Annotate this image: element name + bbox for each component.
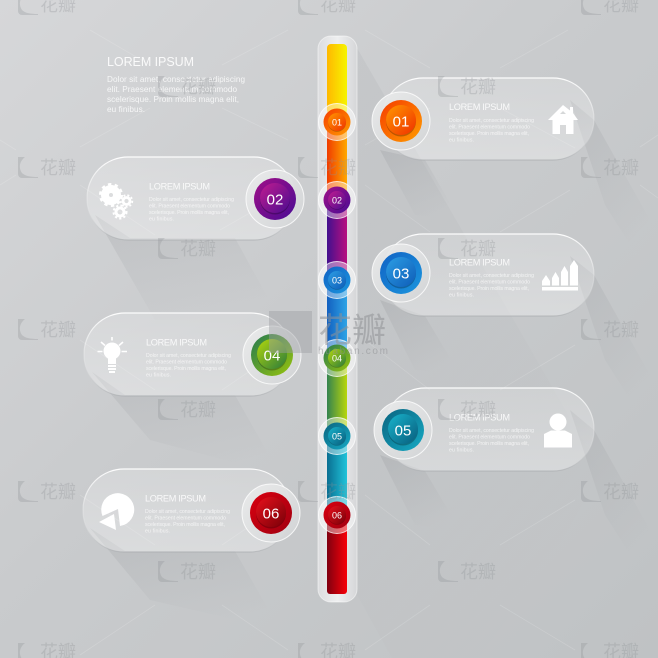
intro body: Dolor sit amet, consectetur adipiscing <box>107 75 245 84</box>
panel 03 <box>372 234 594 316</box>
watermarks: 花瓣 <box>460 400 496 420</box>
small node 06: 06 <box>332 510 342 520</box>
panel 02 text: LOREM IPSUM <box>149 182 210 192</box>
intro body: elit. Praesent elementum commodo <box>107 85 237 94</box>
badge 01 <box>372 92 430 150</box>
panel 05 text <box>449 412 534 454</box>
panel 05 text: scelerisque. Proin mollis magna elit, <box>449 441 529 447</box>
icon: person <box>544 414 572 448</box>
panel 05 <box>374 388 594 471</box>
badge 01: 01 <box>393 114 409 130</box>
watermarks: 花瓣 <box>460 562 496 582</box>
watermarks: huaban.com <box>318 346 388 357</box>
watermarks: 花瓣 <box>180 562 216 582</box>
panel 05 text: Dolor sit amet, consectetur adipiscing <box>449 428 534 434</box>
icon: gears <box>100 184 132 218</box>
panel 01 text: LOREM IPSUM <box>449 102 510 112</box>
panel 03 text <box>449 258 534 298</box>
badge 04: 04 <box>264 348 280 364</box>
watermarks: 花瓣 <box>180 77 216 97</box>
panel 06 text: eu finibus. <box>145 528 170 534</box>
watermarks: 花瓣 <box>603 320 639 340</box>
panel 04 text: eu finibus. <box>146 372 171 378</box>
panel 06 text: LOREM IPSUM <box>145 494 206 504</box>
small node 06 <box>318 496 356 534</box>
panel 03 text: scelerisque. Proin mollis magna elit, <box>449 286 529 292</box>
panel 01 text: eu finibus. <box>449 138 474 144</box>
panel 04 text: LOREM IPSUM <box>146 338 207 348</box>
watermarks: 花瓣 <box>320 158 356 178</box>
small node 01 <box>318 104 356 140</box>
icon: light bulb <box>98 337 127 373</box>
watermarks: 花瓣 <box>40 158 76 178</box>
small node 04: 04 <box>332 354 342 364</box>
badge 02 <box>246 170 304 228</box>
panel 04 text: elit. Praesent elementum commodo <box>146 360 227 366</box>
panel 02 text <box>149 182 234 222</box>
watermarks: 花瓣 <box>603 158 639 178</box>
panel 06 text: elit. Praesent elementum commodo <box>145 516 226 522</box>
panel 01 text <box>449 102 534 144</box>
colour segments <box>327 44 347 594</box>
panel 06 text: scelerisque. Proin mollis magna elit, <box>145 522 225 528</box>
watermarks: 花瓣 <box>318 312 386 350</box>
small node 03: 03 <box>332 276 342 286</box>
panel 03 text: Dolor sit amet, consectetur adipiscing <box>449 273 534 279</box>
panel 05 text: elit. Praesent elementum commodo <box>449 434 530 440</box>
panel 01 text: Dolor sit amet, consectetur adipiscing <box>449 118 534 124</box>
badge 02: 02 <box>267 192 283 208</box>
panel 06 <box>83 469 300 552</box>
panel 04 text <box>146 338 231 378</box>
small node 02: 02 <box>332 196 342 206</box>
watermarks: 花瓣 <box>40 482 76 502</box>
panel 03 text: eu finibus. <box>449 292 474 298</box>
icon: pie chart <box>99 493 134 530</box>
intro body <box>107 75 245 114</box>
watermarks: 花瓣 <box>460 77 496 97</box>
watermarks: 花瓣 <box>180 400 216 420</box>
watermarks: 花瓣 <box>40 320 76 340</box>
panel 02 text: scelerisque. Proin mollis magna elit, <box>149 210 229 216</box>
watermarks: 花瓣 <box>180 239 216 259</box>
panel 06 text: Dolor sit amet, consectetur adipiscing <box>145 509 230 515</box>
vertical tube <box>318 36 357 602</box>
panel 02 text: Dolor sit amet, consectetur adipiscing <box>149 197 234 203</box>
panel 02 text: elit. Praesent elementum commodo <box>149 204 230 210</box>
watermarks: 花瓣 <box>603 482 639 502</box>
intro text block <box>107 55 245 114</box>
panel 02 text: eu finibus. <box>149 216 174 222</box>
badge 03: 03 <box>393 266 409 282</box>
badge 03 <box>372 244 430 302</box>
intro body: eu finibus. <box>107 105 145 114</box>
panel 01 text: scelerisque. Proin mollis magna elit, <box>449 131 529 137</box>
watermarks: 花瓣 <box>460 239 496 259</box>
small node 02 <box>318 182 356 218</box>
panel 04 <box>84 313 301 396</box>
small node 03 <box>318 262 356 298</box>
panel 05 text: eu finibus. <box>449 448 474 454</box>
small node 05: 05 <box>332 432 342 442</box>
icon: rising bars <box>542 260 578 290</box>
badge 05 <box>374 401 432 459</box>
long shadows <box>90 48 650 658</box>
icon: house <box>548 105 578 134</box>
badge 04 <box>243 326 301 384</box>
intro body: scelerisque. Proin mollis magna elit, <box>107 95 239 104</box>
small node 05 <box>318 418 356 454</box>
small node 04 <box>318 340 356 376</box>
small node 01: 01 <box>332 118 342 128</box>
panel 03 text: elit. Praesent elementum commodo <box>449 280 530 286</box>
panel 01 <box>372 78 594 160</box>
panel 04 text: Dolor sit amet, consectetur adipiscing <box>146 353 231 359</box>
badge 06: 06 <box>263 506 279 522</box>
panel 02 <box>87 157 304 240</box>
panel 06 text <box>145 494 230 534</box>
panel 01 text: elit. Praesent elementum commodo <box>449 124 530 130</box>
panel 03 text: LOREM IPSUM <box>449 258 510 268</box>
panel 04 text: scelerisque. Proin mollis magna elit, <box>146 366 226 372</box>
intro heading: LOREM IPSUM <box>107 55 194 69</box>
watermarks: 花瓣 <box>320 482 356 502</box>
badge 05: 05 <box>395 422 411 440</box>
panel 05 text: LOREM IPSUM <box>449 412 510 422</box>
badge 06 <box>242 484 300 542</box>
